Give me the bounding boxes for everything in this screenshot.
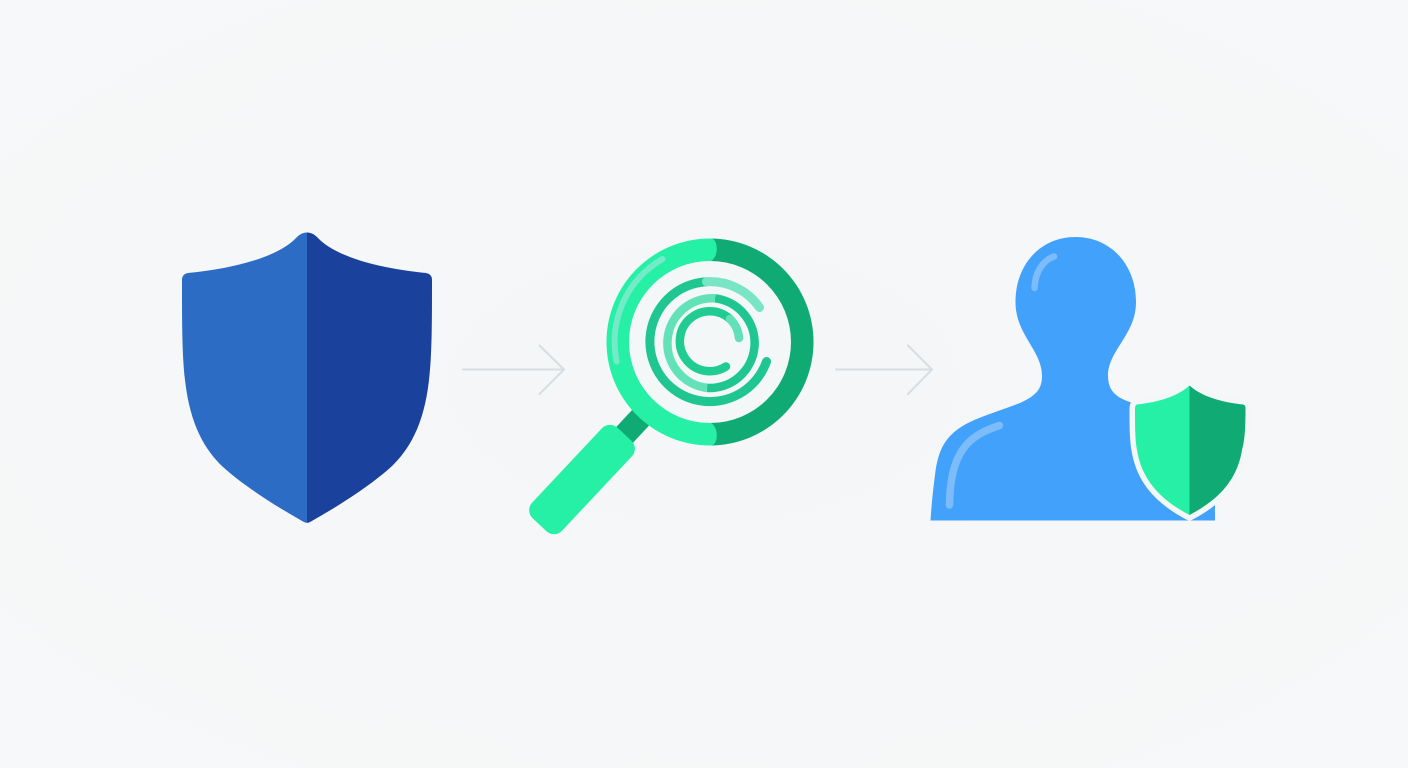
icon: user with shield — [930, 237, 1246, 520]
middle spiral ring — [667, 298, 755, 388]
magnifier neck — [618, 413, 645, 442]
arrow: magnifier to user — [836, 346, 932, 394]
magnifier ring dark half — [710, 238, 814, 446]
shoulder highlight — [950, 426, 1000, 505]
magnifier handle — [525, 420, 639, 539]
small shield right half — [1190, 386, 1246, 515]
outer spiral arc — [650, 282, 766, 402]
magnifier lens fill — [628, 260, 792, 424]
arrow: shield to magnifier — [463, 346, 564, 394]
user silhouette — [930, 237, 1215, 520]
icon: magnifying glass — [525, 238, 814, 539]
head highlight — [1034, 256, 1054, 288]
icon: blue shield — [182, 232, 432, 523]
magnifier ring bright half — [606, 238, 717, 446]
shield cutout outline — [1135, 386, 1245, 515]
ring highlight — [615, 259, 662, 362]
small shield left half — [1135, 386, 1190, 515]
inner spiral arc — [680, 311, 730, 371]
